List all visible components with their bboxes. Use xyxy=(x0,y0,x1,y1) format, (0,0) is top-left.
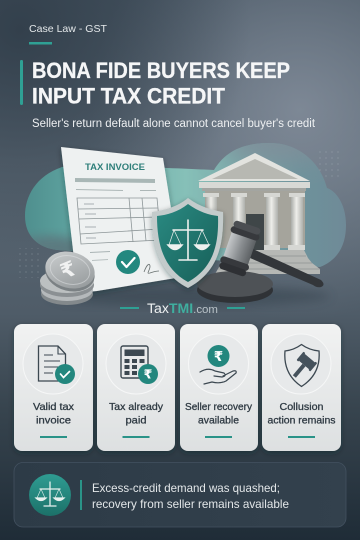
ground shadow xyxy=(50,286,330,306)
icon: tax invoice document xyxy=(61,147,182,293)
eyebrow label: Case Law - GST xyxy=(29,23,108,35)
conclusion text: Excess-credit demand was quashed; xyxy=(92,481,280,495)
title: INPUT TAX CREDIT xyxy=(32,84,226,108)
label xyxy=(109,401,164,426)
label xyxy=(185,401,253,426)
conclusion text: recovery from seller remains available xyxy=(92,497,289,511)
label: Tax already xyxy=(109,401,164,413)
label: action remains xyxy=(268,414,336,426)
icon: scales badge xyxy=(29,474,71,516)
icon: scales on shield xyxy=(168,220,209,260)
icon: tax invoice document: TAX INVOICE xyxy=(85,162,145,173)
label: Collusion xyxy=(280,401,324,413)
label: paid xyxy=(126,414,147,426)
label: Seller recovery xyxy=(185,401,253,413)
label: Valid tax xyxy=(33,401,75,413)
title xyxy=(20,58,290,108)
icon: rupee coins xyxy=(40,246,99,305)
icon: court building xyxy=(198,153,320,274)
label: invoice xyxy=(36,414,71,426)
label xyxy=(268,401,336,426)
icon: shield with scales xyxy=(152,198,223,288)
conclusion text xyxy=(92,481,289,511)
icon: document with check xyxy=(38,346,75,384)
panel: collusion action remains xyxy=(262,324,341,451)
label: available xyxy=(198,414,239,426)
icon: rupee coins: ₹ xyxy=(57,256,79,284)
panel: conclusion xyxy=(14,462,346,527)
logo xyxy=(120,301,245,316)
panel: valid tax invoice xyxy=(14,324,93,451)
label xyxy=(33,401,75,426)
logo: TaxTMI.com xyxy=(147,301,218,316)
icon: calculator with rupee: ₹ xyxy=(144,366,153,382)
panel: tax already paid xyxy=(97,324,175,451)
subtitle: Seller's return default alone cannot cancel buyer's credit xyxy=(32,118,316,130)
teal cloud backdrop xyxy=(25,143,346,267)
title: BONA FIDE BUYERS KEEP xyxy=(32,58,290,83)
icon: hand with rupee coin: ₹ xyxy=(214,349,223,365)
panel: seller recovery available xyxy=(180,324,258,451)
icon: gavel xyxy=(197,219,324,303)
icon: green check xyxy=(116,250,140,274)
hero illustration xyxy=(25,143,346,306)
icon: shield with gavel xyxy=(285,344,319,386)
eyebrow label xyxy=(29,23,108,44)
